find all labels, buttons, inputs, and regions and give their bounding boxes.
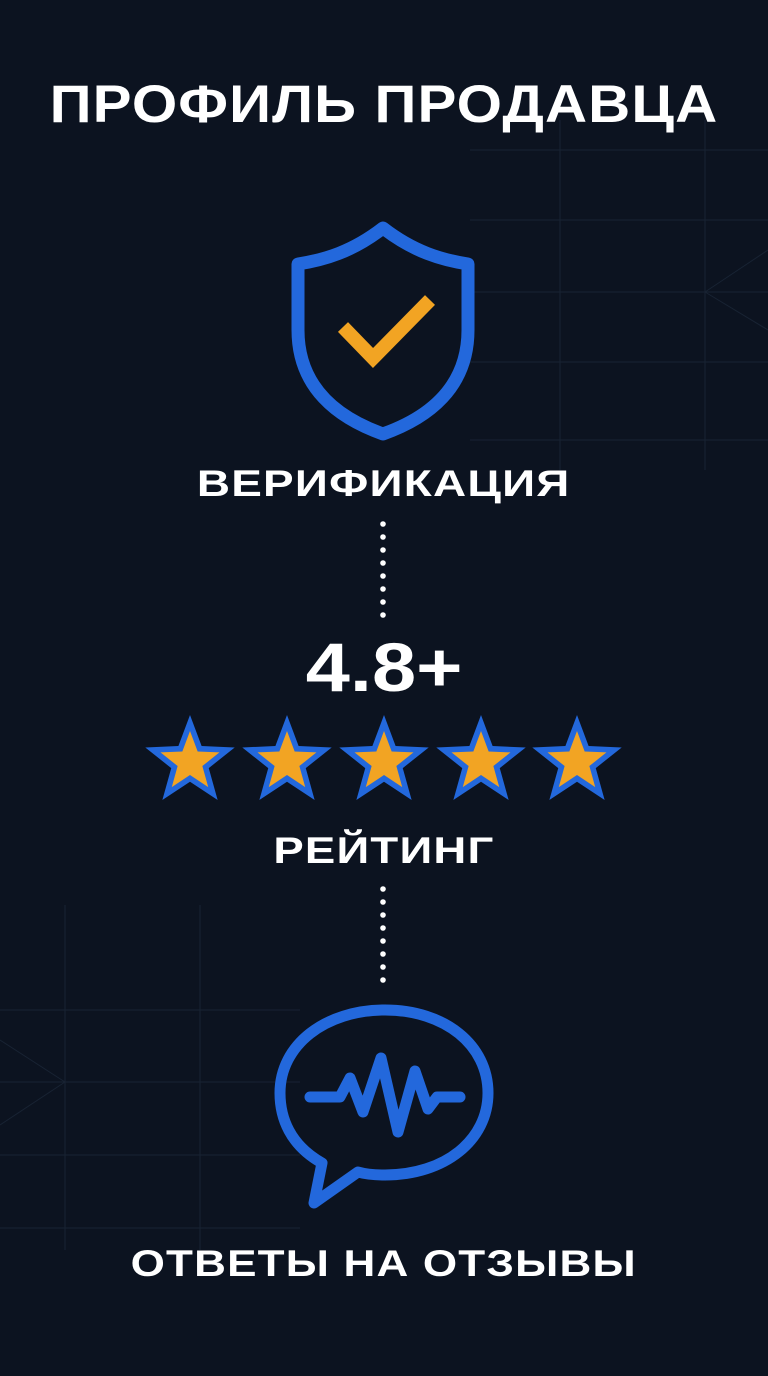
- connector dots 2: [380, 886, 386, 983]
- label: rating: РЕЙТИНГ: [273, 830, 495, 871]
- icon: speech bubble with waveform: [280, 1010, 488, 1203]
- stars rating: [145, 715, 622, 800]
- title: ПРОФИЛЬ ПРОДАВЦА: [50, 75, 718, 134]
- rating number: 4.8+: [306, 629, 462, 706]
- label: verification: ВЕРИФИКАЦИЯ: [197, 463, 571, 504]
- label: review replies: ОТВЕТЫ НА ОТЗЫВЫ: [131, 1243, 637, 1284]
- icon: shield with checkmark: [298, 228, 468, 434]
- connector dots 1: [380, 521, 386, 618]
